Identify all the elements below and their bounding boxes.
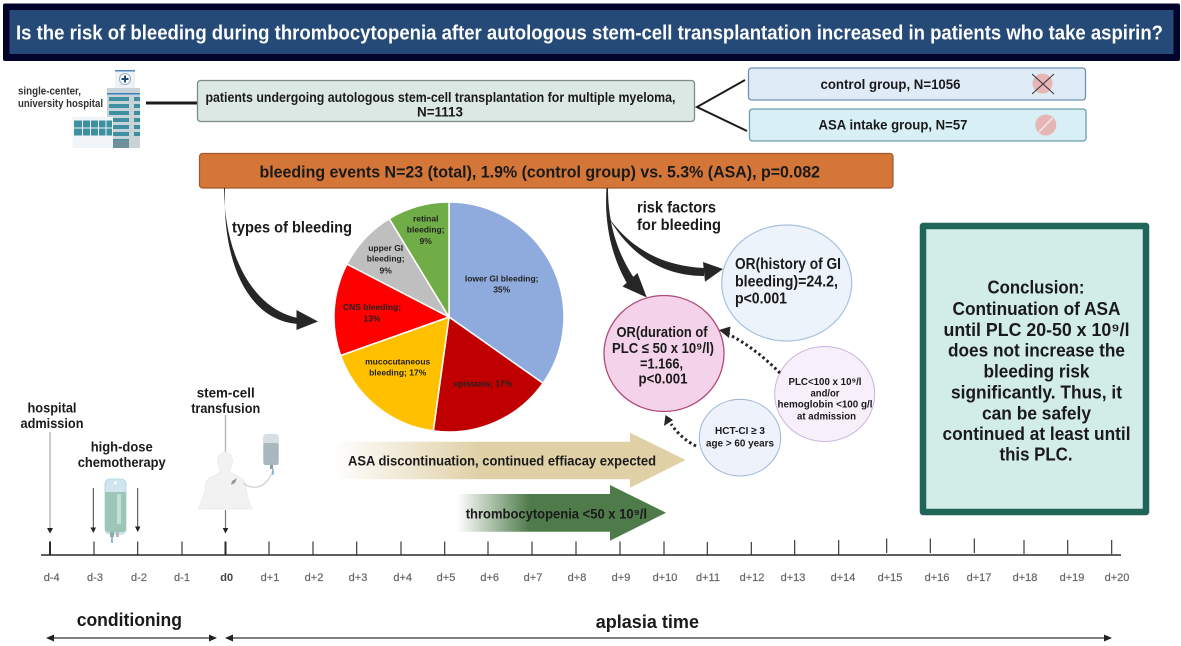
label and arrow: hospital admission: admission	[20, 416, 84, 431]
timeline day labels: d+19	[1060, 572, 1084, 584]
timeline day labels: d-3	[87, 572, 103, 584]
phase: conditioning: conditioning	[77, 609, 182, 630]
circle: OR duration of PLC: OR(duration of	[616, 324, 708, 341]
pie labels: 9%	[420, 236, 432, 246]
pie labels: upper GI	[368, 243, 403, 253]
box: bleeding events	[200, 154, 893, 188]
arrow: to OR history circle	[609, 218, 723, 282]
label: high-dose chemotherapy	[78, 440, 166, 470]
pie labels: 13%	[363, 314, 381, 324]
timeline day labels: d+2	[305, 572, 323, 584]
pie labels: bleeding;	[407, 225, 445, 235]
arrows: chemotherapy start and end	[90, 488, 140, 533]
slice: lower GI bleeding	[449, 202, 564, 383]
box: control group: control group, N=1056	[820, 76, 961, 92]
timeline day labels: d+9	[612, 572, 630, 584]
box: patients: N=1113	[417, 104, 463, 120]
heading: types of bleeding: types of bleeding	[232, 220, 352, 236]
timeline day labels	[44, 572, 1129, 584]
phase: aplasia time	[225, 611, 1112, 642]
timeline axis	[41, 538, 1121, 555]
timeline day labels: d-2	[131, 572, 147, 584]
box: conclusion: can be safely	[982, 402, 1092, 424]
circle: PLC and hemoglobin at admission	[775, 346, 875, 442]
timeline day labels: d+3	[349, 572, 367, 584]
pie labels: bleeding;	[367, 254, 405, 264]
pie chart: types of bleeding	[334, 202, 564, 432]
timeline day labels: d-1	[174, 572, 190, 584]
timeline day labels: d+8	[568, 572, 586, 584]
circle: PLC and hemoglobin at admission: PLC<100 x 10⁹/l	[788, 376, 862, 388]
arrow: to OR duration circle	[606, 188, 647, 298]
timeline day labels: d+10	[653, 572, 677, 584]
timeline day labels: d+6	[480, 572, 499, 584]
arrow: ASA discontinuation: ASA discontinuation, continued effiacay expected	[348, 452, 656, 468]
arrow: thrombocytopenia	[457, 485, 666, 541]
timeline day labels: d+13	[781, 572, 805, 584]
icon: chemotherapy infusion bag	[105, 479, 126, 543]
icon: hospital building	[72, 70, 140, 148]
pie labels: 9%	[380, 265, 392, 275]
arrow fork: patients to groups	[697, 80, 747, 131]
timeline day labels: d+5	[437, 572, 455, 584]
slice: mucocutaneous bleeding	[341, 317, 449, 431]
connector: hospital to patients	[146, 102, 198, 104]
icon: patient receiving transfusion	[198, 434, 279, 509]
timeline day labels: d+14	[831, 572, 855, 584]
circle: OR duration of PLC	[604, 296, 724, 412]
label and arrow: hospital admission: hospital	[28, 401, 76, 416]
label and arrow: hospital admission	[20, 401, 84, 534]
heading: risk factors for bleeding: risk factors	[637, 200, 716, 216]
phase: aplasia time: aplasia time	[596, 611, 699, 632]
pie labels: retinal	[413, 214, 438, 224]
label: stem-cell transfusion: stem-cell	[197, 386, 255, 401]
circle: OR history of GI bleeding: OR(history of GI	[735, 256, 841, 273]
box: ASA intake group: ASA intake group, N=57	[818, 116, 968, 132]
pie labels: 35%	[493, 285, 511, 295]
setting label: single-center hospital	[18, 86, 103, 110]
timeline day labels: d+7	[524, 572, 542, 584]
circle: HCT-CI and age: HCT-CI ≥ 3	[715, 425, 765, 437]
icon: crossed-out pill	[1032, 74, 1054, 94]
box: conclusion	[923, 226, 1146, 512]
timeline day labels: d+18	[1013, 572, 1037, 584]
arrow: stem-cell transfusion to d0	[223, 415, 228, 534]
timeline day labels: d+20	[1105, 572, 1129, 584]
circle: OR history of GI bleeding: bleeding)=24.2,	[735, 274, 838, 290]
slice: retinal bleeding	[389, 202, 449, 317]
label: high-dose chemotherapy: chemotherapy	[78, 455, 166, 470]
circle: OR duration of PLC: =1.166,	[640, 356, 683, 372]
box: ASA intake group	[750, 109, 1086, 141]
circle: HCT-CI and age	[699, 399, 781, 476]
box: patients: patients undergoing autologous stem-cell transplantation for multiple myeloma,	[206, 90, 676, 105]
title banner	[3, 4, 1180, 61]
pie labels: lower GI bleeding;	[465, 274, 539, 284]
pie labels: CNS bleeding;	[343, 302, 401, 312]
timeline day labels: d+16	[925, 572, 949, 584]
label: high-dose chemotherapy: high-dose	[91, 440, 153, 455]
box: conclusion: this PLC.	[1000, 444, 1072, 464]
pie labels: mucocutaneous	[365, 356, 431, 366]
pie labels: epistaxis; 17%	[454, 379, 513, 389]
circle: PLC and hemoglobin at admission: hemoglobin <100 g/l	[778, 399, 873, 411]
box: conclusion: Continuation of ASA	[952, 298, 1120, 319]
circle: OR history of GI bleeding: p<0.001	[735, 290, 787, 308]
timeline day labels: d+12	[740, 572, 764, 584]
icon: aspirin pill	[1035, 114, 1056, 136]
box: control group	[748, 68, 1086, 100]
dotted arrow: HCT circle to OR duration	[664, 415, 696, 446]
heading: risk factors for bleeding: for bleeding	[637, 217, 721, 234]
box: patients	[198, 80, 694, 122]
arrow: to types of bleeding	[224, 188, 318, 330]
box: bleeding events: bleeding events N=23 (total), 1.9% (control group) vs. 5.3% (ASA), p=0.082	[260, 164, 820, 182]
box: conclusion: bleeding risk	[984, 360, 1090, 382]
box: conclusion: significantly. Thus, it	[951, 382, 1122, 402]
pie labels: bleeding; 17%	[369, 368, 427, 378]
dotted arrow: PLC circle to OR duration	[719, 326, 780, 373]
slice: epistaxis	[433, 317, 543, 432]
circle: OR duration of PLC: PLC ≤ 50 x 10⁹/l)	[612, 340, 714, 357]
label: stem-cell transfusion	[191, 386, 260, 416]
circle: OR history of GI bleeding	[722, 225, 852, 341]
circle: PLC and hemoglobin at admission: at admission	[797, 410, 856, 422]
label: stem-cell transfusion: transfusion	[191, 401, 260, 416]
timeline day labels: d-4	[44, 572, 60, 584]
pie labels	[343, 214, 539, 389]
timeline day labels: d+17	[967, 572, 991, 584]
box: conclusion: does not increase the	[948, 340, 1125, 360]
arrow: thrombocytopenia: thrombocytopenia <50 x 10⁹/l	[466, 506, 647, 522]
setting label: single-center hospital: single-center,	[18, 86, 81, 98]
slice: upper GI bleeding	[347, 219, 449, 317]
circle: OR duration of PLC: p<0.001	[638, 370, 688, 388]
timeline day labels: d0	[220, 572, 233, 584]
setting label: single-center hospital: university hospital	[18, 98, 103, 110]
slice: CNS bleeding	[334, 264, 449, 356]
box: conclusion: until PLC 20-50 x 10⁹/l	[944, 319, 1130, 340]
box: conclusion: Conclusion:	[988, 276, 1084, 298]
timeline day labels: d+15	[878, 572, 902, 584]
circle: PLC and hemoglobin at admission: and/or	[810, 388, 840, 400]
arrow: ASA discontinuation	[332, 433, 686, 488]
icon: stem-cell bag	[263, 434, 279, 475]
timeline day labels: d+1	[261, 572, 279, 584]
circle: HCT-CI and age: age > 60 years	[706, 438, 774, 450]
timeline day labels: d+11	[696, 572, 720, 584]
box: conclusion: continued at least until	[942, 423, 1130, 444]
timeline day labels: d+4	[393, 572, 412, 584]
heading: risk factors for bleeding	[637, 200, 721, 234]
phase: conditioning	[46, 609, 217, 642]
